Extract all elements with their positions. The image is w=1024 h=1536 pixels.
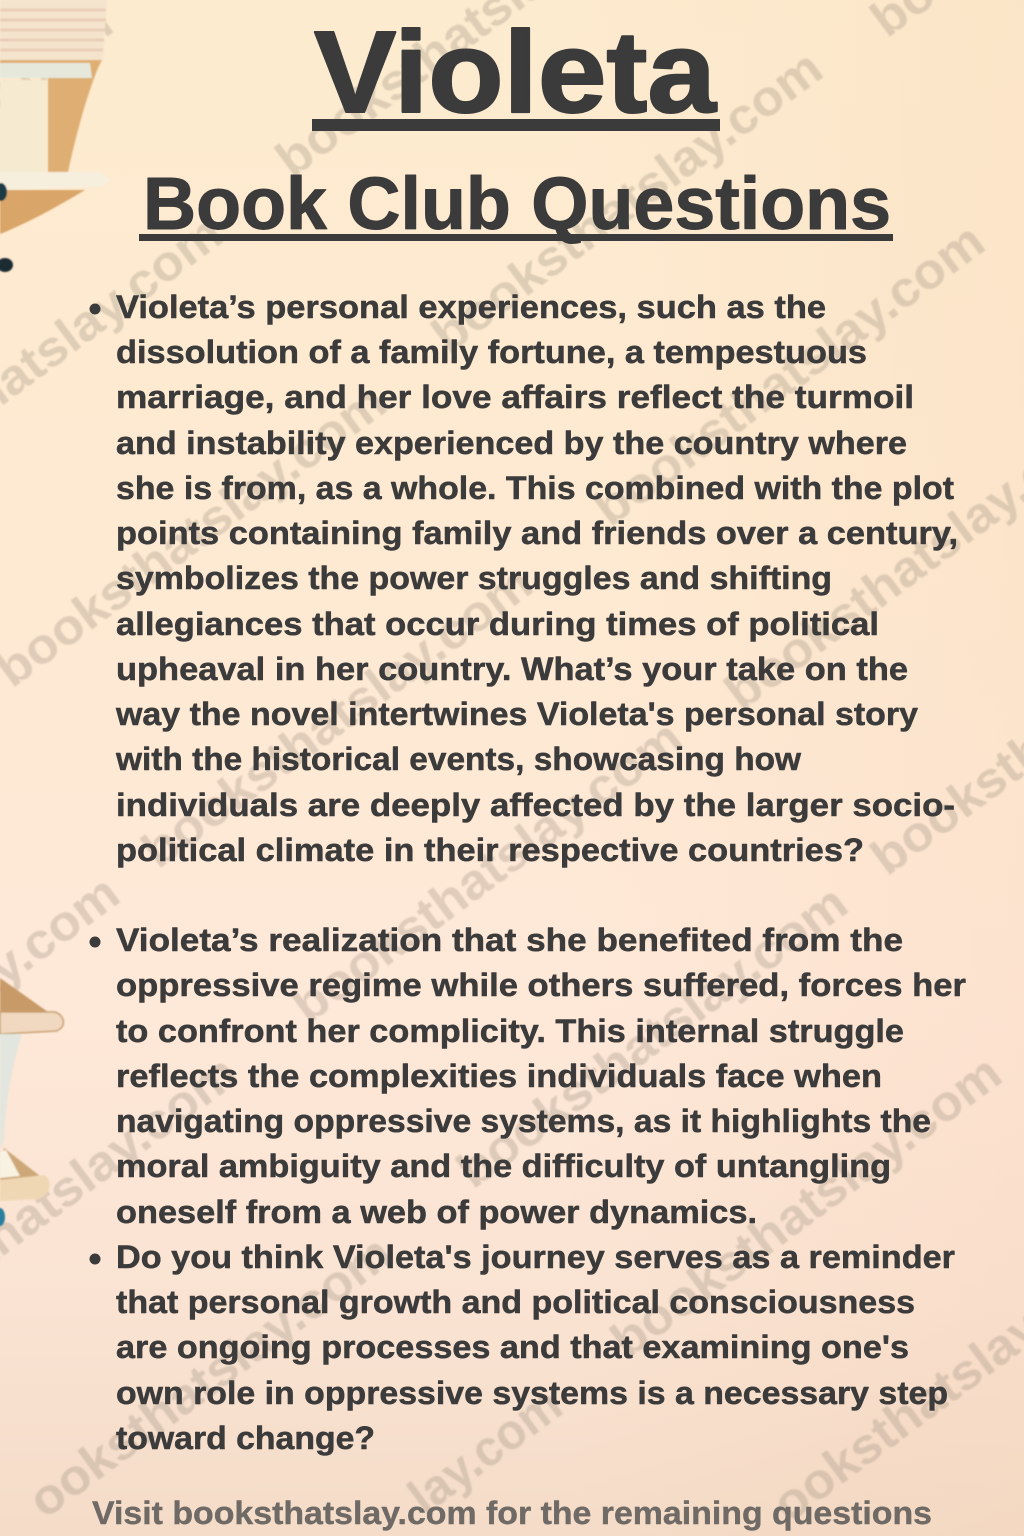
question 1: with the historical events, showcasing how <box>115 741 801 777</box>
question 2: reflects the complexities individuals face when <box>116 1058 882 1094</box>
question 1: marriage, and her love affairs reflect the turmoil <box>116 379 914 415</box>
illustration: book stack top left <box>0 0 111 272</box>
question 1: she is from, as a whole. This combined with the plot <box>116 470 954 506</box>
watermarks: booksthatslay.com <box>446 874 857 1199</box>
question 2: oppressive regime while others suffered, forces her <box>116 967 966 1003</box>
question 1 <box>90 289 958 868</box>
question 3: toward change? <box>116 1420 375 1456</box>
question 1: upheaval in her country. What’s your take on the <box>116 651 908 687</box>
bullet <box>90 304 100 314</box>
watermarks: booksthatslay.com <box>421 39 832 364</box>
question 1: and instability experienced by the country where <box>116 425 907 461</box>
question 2 <box>90 922 966 1230</box>
question 1: political climate in their respective countries? <box>116 832 864 868</box>
question 2: moral ambiguity and the difficulty of untangling <box>116 1148 891 1184</box>
question 2: oneself from a web of power dynamics. <box>116 1194 757 1230</box>
watermarks: booksthatslay.com <box>131 554 542 879</box>
watermarks: booksthatslay.com <box>600 1044 1011 1369</box>
question 2: to confront her complicity. This internal struggle <box>116 1013 904 1049</box>
watermarks: booksthatslay.com <box>583 212 994 537</box>
title: Violeta <box>314 7 718 137</box>
subtitle: Book Club Questions <box>143 162 891 245</box>
illustration: book stack lower left <box>0 978 63 1226</box>
watermarks: lay.com <box>398 1376 572 1525</box>
question 3: that personal growth and political consciousness <box>116 1284 915 1320</box>
question 1: points containing family and friends over a century, <box>116 515 958 551</box>
question 1: way the novel intertwines Violeta's personal story <box>115 696 918 732</box>
question 3: are ongoing processes and that examining one's <box>116 1329 909 1365</box>
question 1: symbolizes the power struggles and shifting <box>116 560 832 596</box>
question 2: Violeta’s realization that she benefited from the <box>116 922 903 958</box>
bullet <box>90 1254 100 1264</box>
footer call to action: Visit booksthatslay.com for the remaining questions <box>92 1495 932 1531</box>
question 1: Violeta’s personal experiences, such as the <box>116 289 826 325</box>
question 1: dissolution of a family fortune, a tempestuous <box>116 334 867 370</box>
question 3: Do you think Violeta's journey serves as a reminder <box>116 1239 955 1275</box>
question 1: individuals are deeply affected by the larger socio- <box>116 787 955 823</box>
question 2: navigating oppressive systems, as it highlights the <box>116 1103 931 1139</box>
question 3 <box>90 1239 955 1456</box>
watermarks: ooksthatslay.com <box>18 1224 402 1529</box>
watermarks: booksthatslay.com <box>281 709 692 1034</box>
question 3: own role in oppressive systems is a necessary step <box>116 1375 948 1411</box>
bullet <box>90 936 100 948</box>
question 1: allegiances that occur during times of political <box>116 606 879 642</box>
